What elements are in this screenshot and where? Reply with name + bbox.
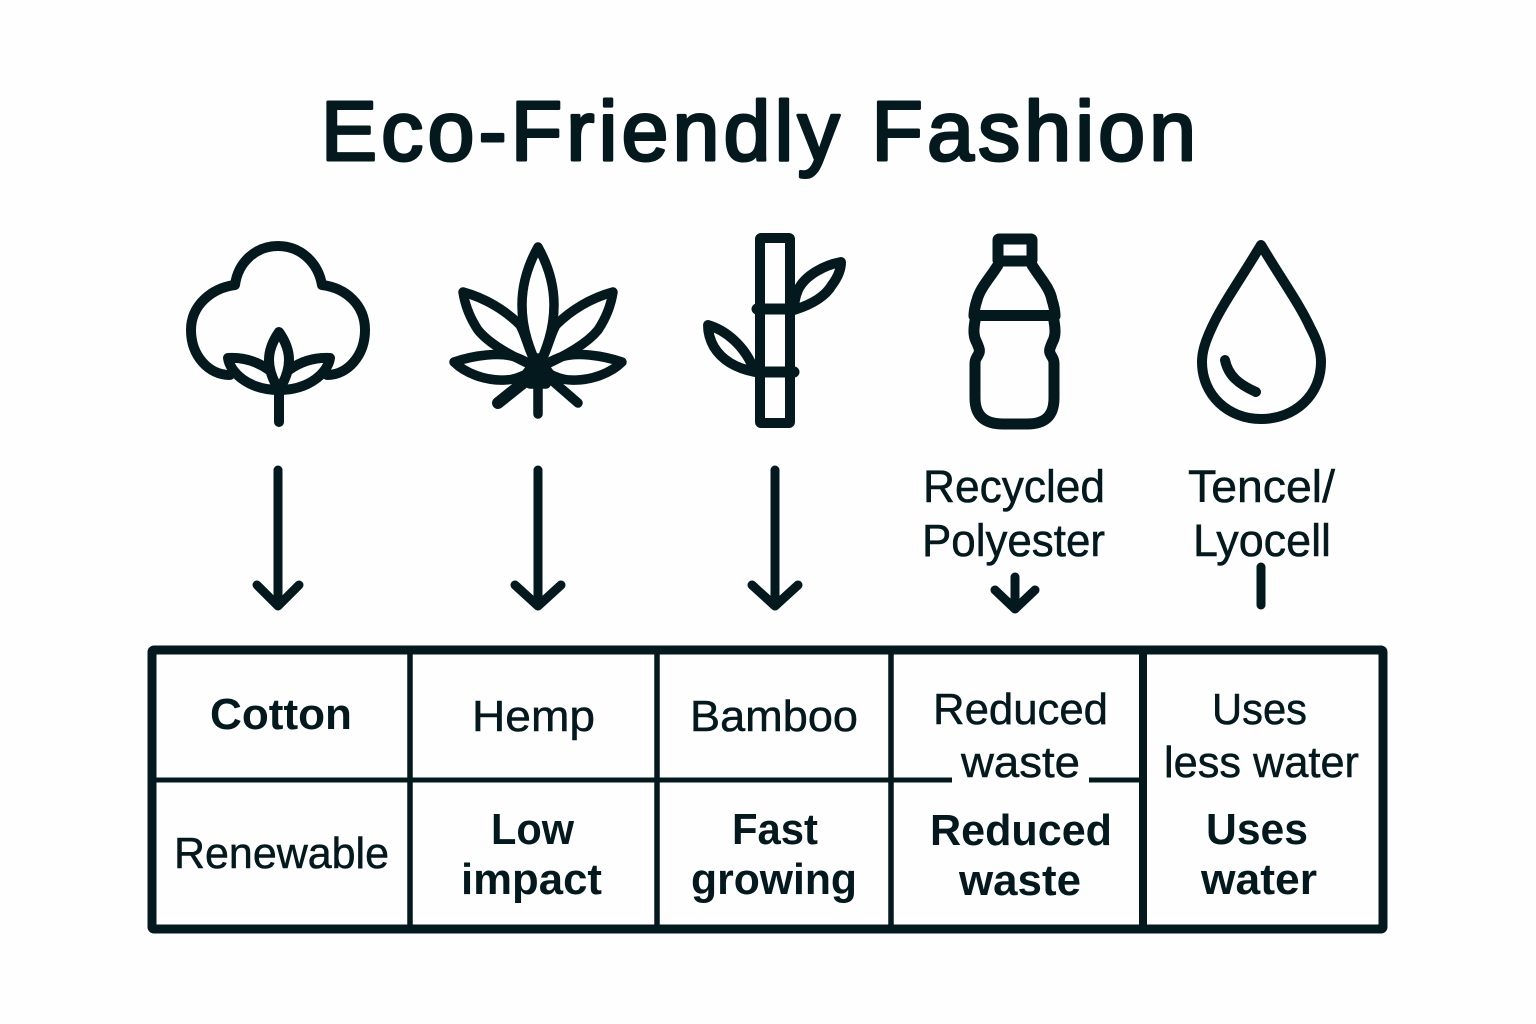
icon: plastic bottle	[974, 239, 1055, 424]
cell: fast growing	[691, 805, 857, 904]
arrow: recycled polyester	[995, 577, 1035, 609]
cell: reduced waste: Reduced	[933, 685, 1108, 734]
label: recycled polyester: Recycled	[923, 461, 1105, 512]
arrow stem: tencel	[1256, 567, 1266, 605]
cell: bamboo: Bamboo	[690, 692, 858, 741]
cell: uses less water: Uses	[1212, 685, 1307, 734]
label: tencel lyocell: Lyocell	[1193, 515, 1331, 566]
icon: hemp leaf	[454, 247, 622, 414]
cell: reduced waste bold	[930, 806, 1112, 905]
cell: uses less water	[1164, 685, 1359, 787]
cell: low impact: impact	[461, 855, 602, 904]
arrow: hemp	[515, 470, 561, 606]
cell: uses water	[1200, 805, 1317, 904]
label: tencel lyocell: Tencel/	[1188, 461, 1335, 512]
cell: reduced waste bold: waste	[958, 856, 1081, 905]
table	[152, 650, 1383, 929]
cell: fast growing: Fast	[732, 805, 818, 854]
cell: reduced waste bold: Reduced	[930, 806, 1112, 855]
cell: uses water: Uses	[1206, 805, 1308, 854]
arrow: bamboo	[752, 470, 798, 606]
cell: uses less water: less water	[1164, 738, 1359, 787]
cell: reduced waste: waste	[960, 738, 1080, 787]
table grid	[152, 650, 1383, 929]
arrow: cotton	[257, 470, 299, 606]
cell: uses water: water	[1200, 855, 1317, 904]
label: recycled polyester	[922, 461, 1105, 566]
cell: low impact	[461, 805, 602, 904]
cell: cotton: Cotton	[210, 690, 352, 739]
cell: fast growing: growing	[691, 855, 857, 904]
label: tencel lyocell	[1188, 461, 1335, 566]
cell: hemp: Hemp	[472, 692, 595, 741]
icon: cotton	[191, 246, 365, 422]
icon: bamboo	[708, 238, 841, 423]
cell: reduced waste	[933, 685, 1108, 787]
label: recycled polyester: Polyester	[922, 515, 1105, 566]
icon: water drop	[1202, 245, 1321, 419]
cell: low impact: Low	[491, 805, 575, 854]
title: Eco-Friendly Fashion	[321, 84, 1196, 178]
cell: renewable: Renewable	[174, 829, 389, 878]
